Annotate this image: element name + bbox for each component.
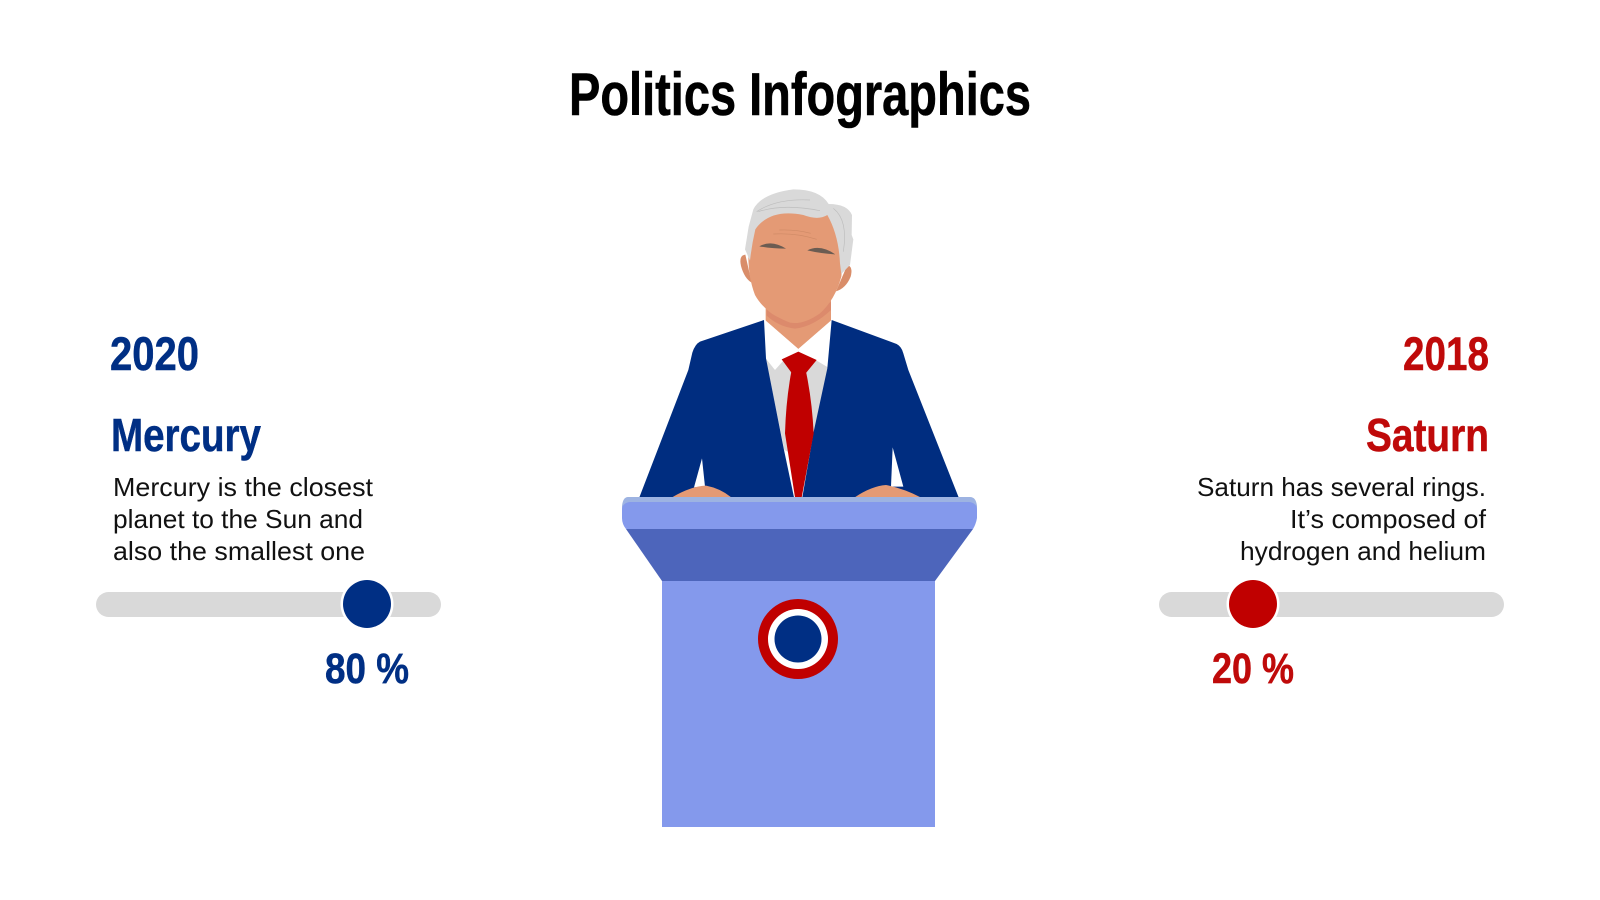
text block: Mercury description: Mercury is the closest xyxy=(113,472,374,502)
tie xyxy=(782,352,817,497)
shirt xyxy=(764,321,832,457)
slider: 20 percent xyxy=(1159,578,1504,630)
text block: Saturn description xyxy=(1197,472,1487,566)
heading: Saturn: Saturn xyxy=(1366,409,1489,461)
neck shadow xyxy=(767,302,831,329)
text block: Saturn description: Saturn has several rings. xyxy=(1197,472,1486,502)
forehead wrinkles xyxy=(773,230,817,239)
neck xyxy=(766,300,831,349)
panel: Saturn xyxy=(1159,327,1504,693)
value: 80 %: 80 % xyxy=(325,645,409,693)
text block: Mercury description xyxy=(113,472,374,566)
podium slope xyxy=(626,529,973,581)
text block: Mercury description: planet to the Sun and xyxy=(113,504,363,534)
arm gaps xyxy=(694,447,903,487)
value: 20 %: 20 % xyxy=(1212,645,1294,693)
face xyxy=(748,207,842,323)
hands xyxy=(672,485,921,497)
year: 2020: 2020 xyxy=(110,327,199,380)
title: Politics Infographics xyxy=(569,61,1031,128)
panel: Mercury xyxy=(96,327,441,693)
text block: Saturn description: hydrogen and helium xyxy=(1240,536,1486,566)
illustration: politician xyxy=(639,189,959,497)
eyebrows xyxy=(759,243,835,254)
ears xyxy=(740,255,851,291)
text block: Saturn description: It’s composed of xyxy=(1290,504,1487,534)
heading: Mercury: Mercury xyxy=(111,409,261,461)
hair xyxy=(745,189,853,274)
illustration: podium xyxy=(622,497,977,827)
podium column xyxy=(662,581,935,827)
podium top edge xyxy=(622,497,977,510)
emblem xyxy=(758,599,838,679)
podium shelf xyxy=(622,502,977,529)
year: 2018: 2018 xyxy=(1403,327,1489,380)
slider: 80 percent xyxy=(96,578,441,630)
jacket xyxy=(639,320,959,497)
text block: Mercury description: also the smallest one xyxy=(113,536,365,566)
